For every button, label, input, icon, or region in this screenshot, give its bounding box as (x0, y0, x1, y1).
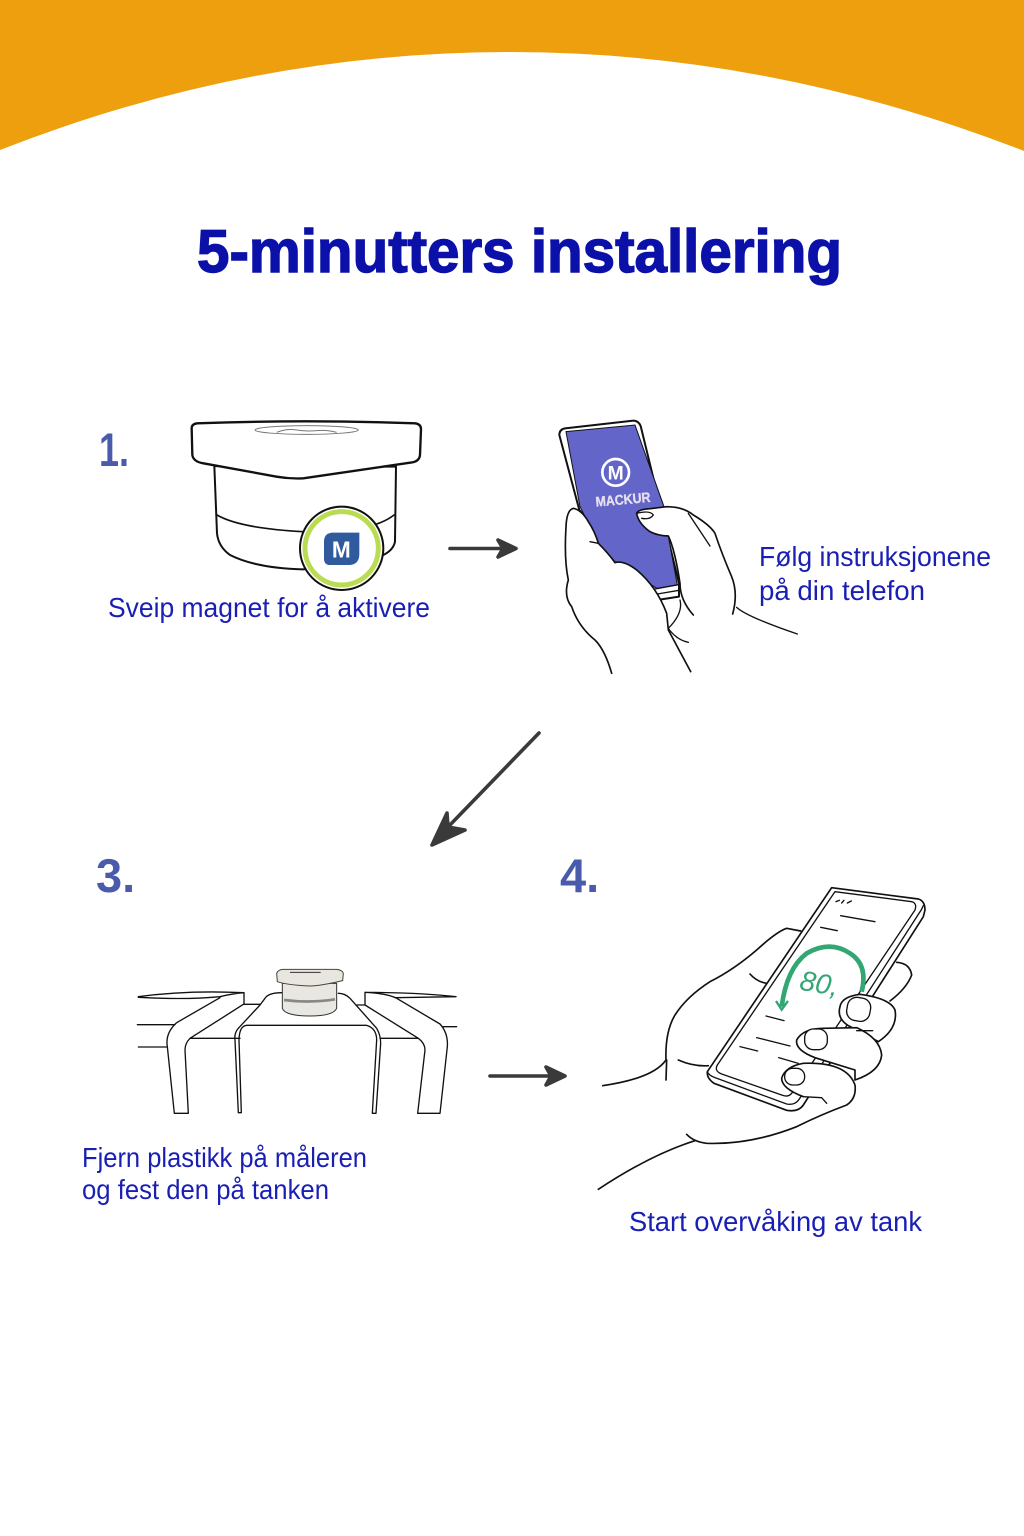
caption step 2 (759, 541, 991, 606)
app logo: MACKUR (595, 489, 651, 510)
step 3 number: 3. (96, 849, 135, 902)
right hand (637, 507, 797, 634)
phone body (707, 888, 925, 1111)
tank level gauge: 80, (798, 965, 841, 1002)
caption step 2: på din telefon (759, 575, 925, 606)
phone screen (566, 425, 677, 588)
app logo: M (608, 463, 624, 484)
icon: hands holding phone with app (559, 421, 797, 673)
caption step 3: Fjern plastikk på måleren (82, 1142, 367, 1173)
meter on tank (277, 969, 343, 1016)
caption step 3 (82, 1142, 367, 1205)
left hand (565, 508, 691, 673)
title: 5-minutters installering (197, 218, 842, 285)
icon: M badge: M (332, 536, 351, 562)
icon: hand holding phone with tank level (598, 888, 925, 1189)
tank level gauge (776, 947, 863, 1010)
arrow: step 2 to 3 (432, 733, 539, 845)
icon: meter mounted on tank (137, 969, 457, 1113)
app logo (595, 459, 651, 510)
caption step 4: Start overvåking av tank (629, 1206, 923, 1237)
fingers (687, 994, 895, 1143)
step 1 number: 1. (99, 423, 129, 476)
tank outline (137, 992, 457, 1113)
caption step 3: og fest den på tanken (82, 1174, 329, 1205)
arrow: step 1 to 2 (450, 540, 516, 557)
step 4 number: 4. (560, 849, 599, 902)
icon: magnet meter device (192, 421, 421, 590)
caption step 2: Følg instruksjonene (759, 541, 991, 572)
palm behind phone (598, 928, 912, 1189)
arrow: step 3 to 4 (490, 1067, 565, 1085)
orange top banner (0, 0, 1024, 151)
icon: M badge (300, 507, 383, 590)
caption step 1: Sveip magnet for å aktivere (108, 592, 430, 623)
